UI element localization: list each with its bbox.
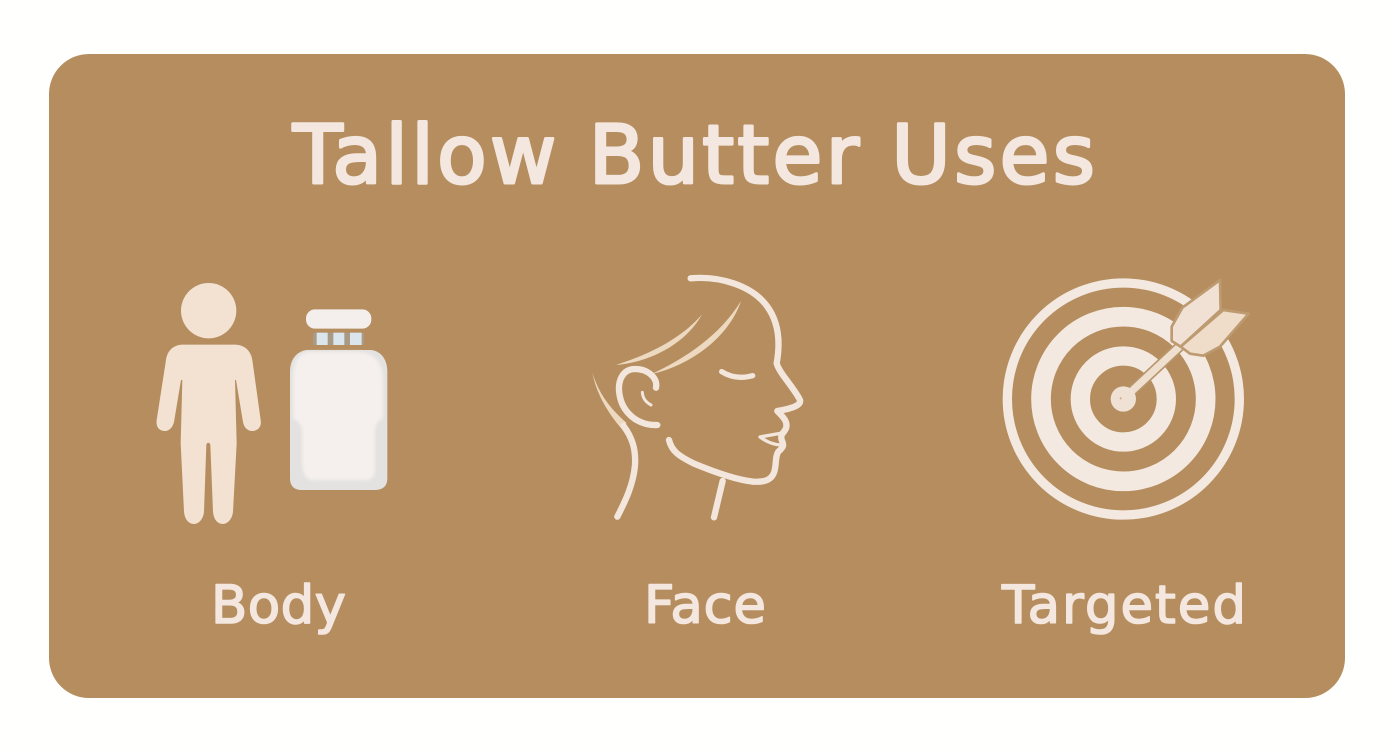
hair strands xyxy=(592,301,741,428)
target rings xyxy=(1007,283,1239,515)
icon: face profile xyxy=(592,278,800,517)
icon: bottle xyxy=(290,309,387,490)
label: Face: Face xyxy=(644,575,766,636)
label: Body: Body xyxy=(211,575,346,636)
panel: tan background card xyxy=(49,54,1345,698)
arrow xyxy=(1111,280,1249,412)
label: Targeted: Targeted xyxy=(1001,575,1246,636)
icon: target with arrow xyxy=(1007,280,1249,515)
icon: person with bottle (body) xyxy=(157,283,387,524)
icon: person xyxy=(157,283,261,524)
face outline xyxy=(617,278,800,517)
title: Tallow Butter Uses xyxy=(292,109,1095,203)
